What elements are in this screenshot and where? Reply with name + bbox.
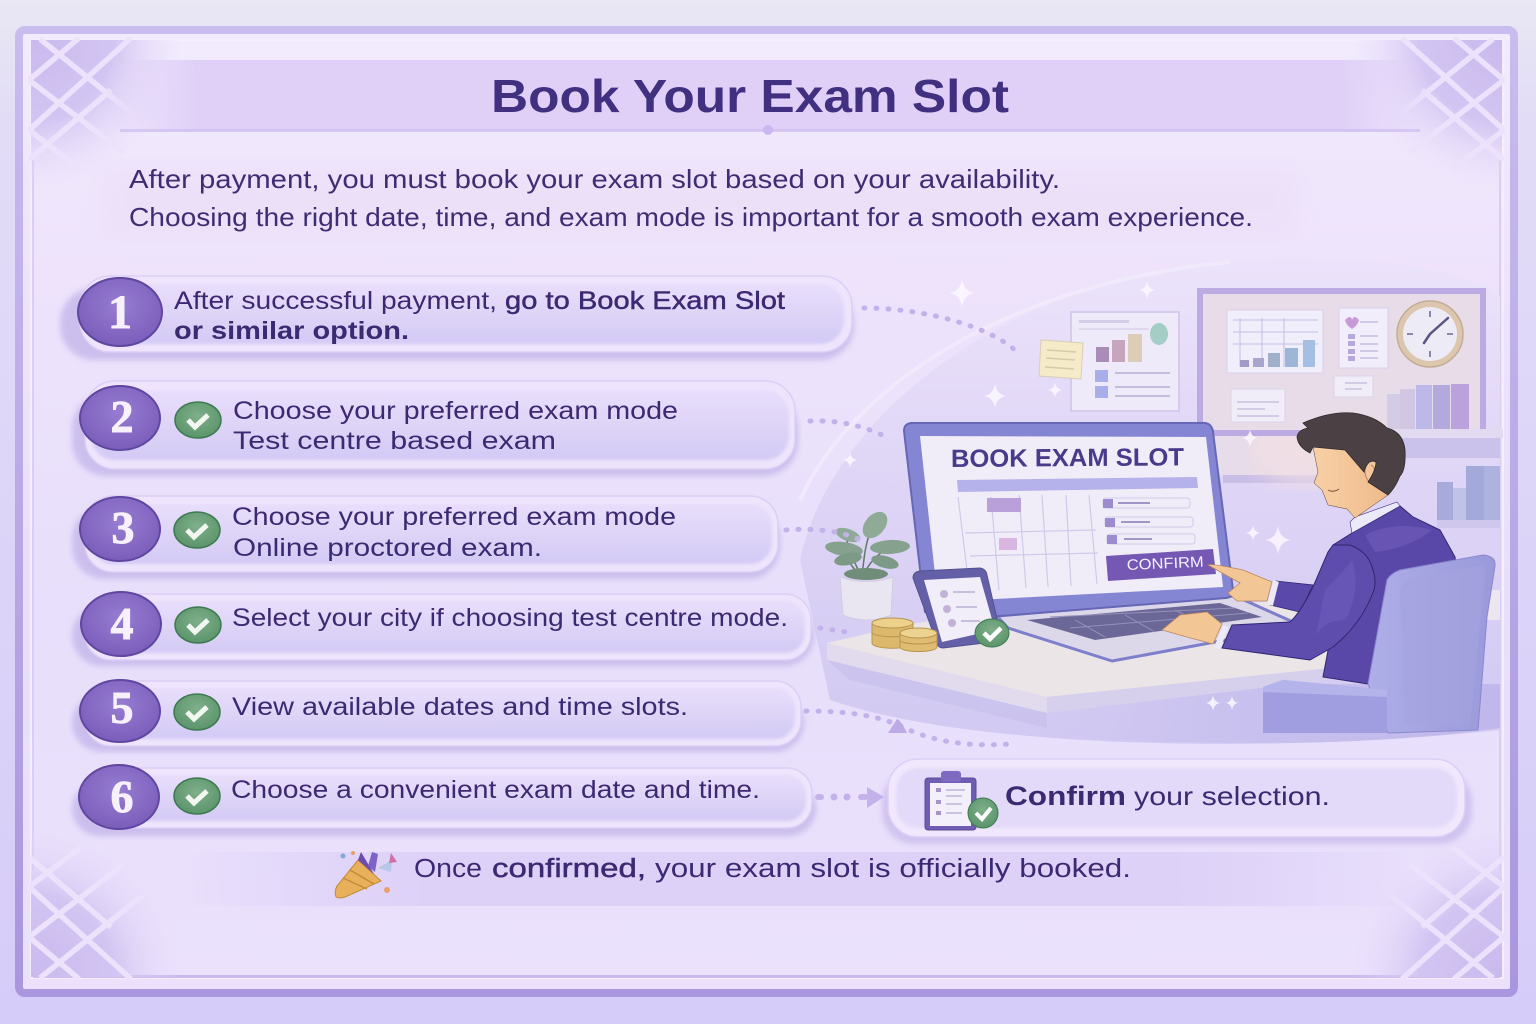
office chair: [1263, 555, 1495, 733]
step 2 pill: [72, 381, 798, 476]
step 3 number: 3: [112, 502, 134, 553]
footer text: Once: [414, 855, 482, 883]
neck and face: [1313, 440, 1388, 518]
hair: [1297, 413, 1405, 495]
tablet: [913, 568, 1009, 648]
step 5 check icon: [174, 694, 220, 730]
confirm text: [1005, 781, 1330, 811]
sticky note: [1039, 340, 1083, 379]
footer text: your exam slot is officially booked.: [655, 855, 1131, 883]
step 5 number: 5: [110, 682, 134, 733]
confirm button: CONFIRM: [1126, 554, 1204, 574]
collar: [1350, 502, 1400, 533]
step 3: [72, 496, 780, 579]
step 4 number: 4: [110, 598, 134, 649]
resting hand: [1162, 612, 1222, 644]
shelves and lower books: [1385, 429, 1503, 528]
step 4 text: Select your city if choosing test centre mode.: [232, 604, 788, 632]
confirmation footer band: [180, 851, 1420, 906]
upper shelf books: [1387, 384, 1469, 429]
step 3 number: [80, 497, 160, 561]
step 3 text: Choose your preferred exam mode: [232, 503, 676, 531]
wall clock: [1397, 301, 1463, 367]
laptop screen: [904, 423, 1233, 616]
step 3 check icon: [174, 512, 220, 548]
laptop: BOOK EXAM SLOT: [951, 443, 1184, 473]
step 3 pill: [72, 496, 780, 579]
plant: [824, 507, 910, 620]
pinned notes: [1231, 376, 1373, 422]
step 6 pill: [72, 768, 816, 836]
step 6 number: 6: [110, 771, 134, 822]
pointing hand: [1208, 565, 1272, 601]
step 1 text: After successful payment,: [174, 287, 497, 315]
step 3 text: [232, 503, 676, 562]
step 4 pill: [72, 594, 814, 666]
pin board: [1200, 291, 1483, 433]
footer text: confirmed,: [492, 855, 646, 883]
step 2 check icon: [175, 402, 221, 438]
step 5 number: [80, 680, 160, 742]
step 2 text: Choose your preferred exam mode: [233, 397, 678, 425]
step 6 number: [79, 765, 159, 829]
wall chart paper: [1071, 312, 1179, 411]
step 4 check icon: [175, 607, 221, 643]
step 2: [72, 381, 798, 476]
step 5 pill: [72, 681, 804, 752]
board chart paper: [1227, 310, 1323, 373]
step 4 number: [81, 592, 161, 656]
intro text: Choosing the right date, time, and exam mode is important for a smooth exam experience.: [129, 202, 1253, 232]
step 6 check icon: [174, 778, 220, 814]
tablet check badge: [975, 619, 1009, 647]
confirm selection box: [882, 759, 1472, 844]
intro text: [100, 164, 1300, 235]
scene backdrop: [800, 258, 1500, 744]
suit torso: [1323, 506, 1460, 690]
step 4: [72, 592, 814, 666]
step 2 text: Test centre based exam: [233, 427, 556, 455]
sparkles: [843, 279, 1471, 730]
calendar grid: [958, 495, 1098, 590]
step 1: [60, 276, 854, 360]
step 5 text: View available dates and time slots.: [232, 693, 688, 721]
step 6 text: Choose a convenient exam date and time.: [231, 776, 760, 804]
arm sleeves: [1270, 581, 1313, 612]
keyboard: [1027, 603, 1262, 640]
checklist paper: [1339, 308, 1388, 368]
smile: [1328, 489, 1339, 491]
laptop: [904, 423, 1302, 661]
confirm text: your selection.: [1134, 781, 1330, 811]
arrow to confirm box: [815, 787, 884, 808]
step 1 text: go to Book Exam Slot: [505, 287, 785, 315]
time slot rows: [1103, 498, 1195, 544]
person: [1162, 413, 1460, 690]
desk: [827, 590, 1500, 728]
step 2 number: 2: [110, 391, 134, 442]
confirm button: [1106, 549, 1216, 581]
illustration: person booking exam slot on laptop: [786, 258, 1503, 745]
step 1 number: [78, 278, 162, 346]
title: Book Your Exam Slot: [491, 70, 1009, 122]
confirm text: Confirm: [1005, 781, 1126, 811]
step 1 text: [174, 287, 785, 345]
party popper icon: [335, 851, 397, 898]
step 5: [72, 680, 804, 752]
clipboard icon: [925, 771, 998, 830]
step 1 number: 1: [108, 286, 132, 339]
intro text: After payment, you must book your exam slot based on your availability.: [129, 164, 1060, 194]
dotted connectors: [786, 308, 1018, 745]
step 1 pill: [60, 276, 854, 360]
step 6: [72, 765, 816, 836]
ear: [1365, 459, 1381, 483]
step 3 text: Online proctored exam.: [233, 534, 542, 562]
shirt cuffs: [1270, 581, 1276, 605]
gold coins: [872, 618, 937, 652]
step 2 text: [233, 397, 678, 455]
step 2 number: [80, 386, 160, 450]
footer text: [414, 855, 1131, 883]
laptop base: [997, 596, 1302, 661]
back wall and floor tones: [1000, 415, 1500, 743]
step 1 text: or similar option.: [174, 317, 409, 345]
clipboard check badge: [968, 798, 998, 828]
title banner: [105, 60, 1435, 135]
